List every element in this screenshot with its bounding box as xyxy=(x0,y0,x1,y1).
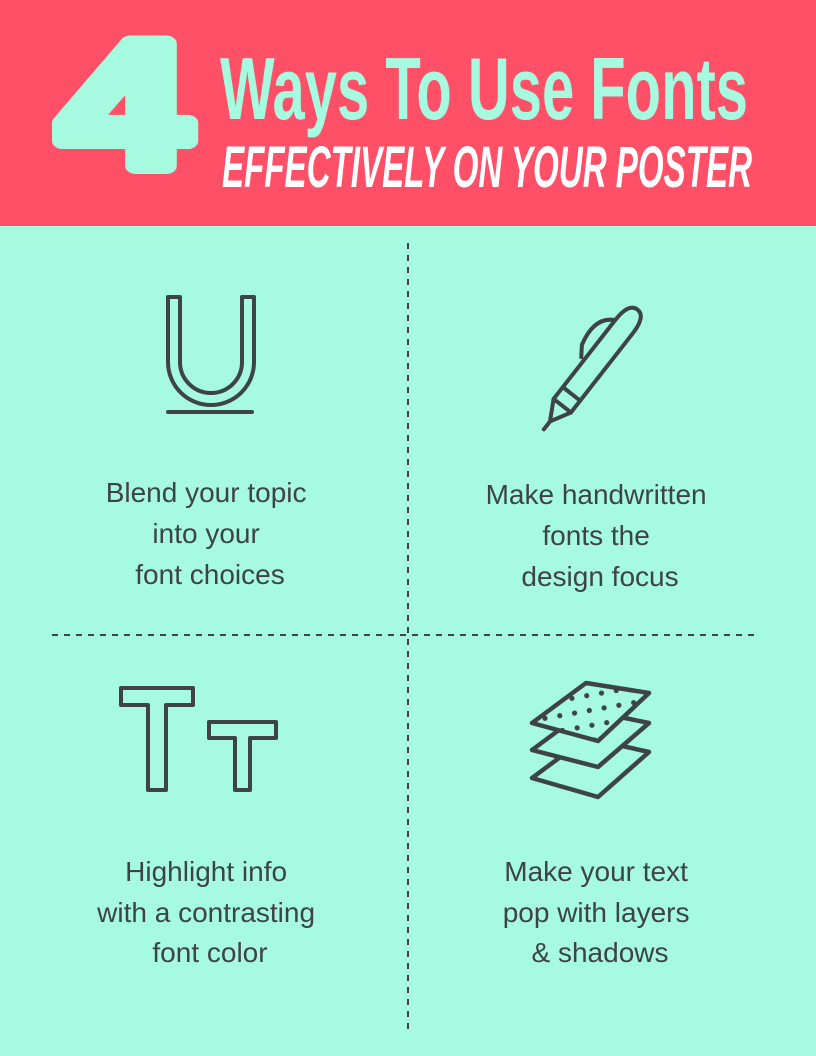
text: blend topic: into your xyxy=(152,518,260,549)
icon: layers xyxy=(532,683,649,797)
header banner xyxy=(0,0,816,226)
text: layers: pop with layers xyxy=(503,897,689,928)
text: blend topic: Blend your topic xyxy=(106,477,307,508)
text: layers: & shadows xyxy=(532,937,668,968)
text: layers: Make your text xyxy=(504,856,688,887)
text: highlight: Highlight info xyxy=(125,856,287,887)
text: handwritten: Make handwritten xyxy=(486,479,707,510)
text: highlight: font color xyxy=(152,937,268,968)
icon: pen xyxy=(525,295,646,436)
text: highlight: with a contrasting xyxy=(96,897,315,928)
text: blend topic: font choices xyxy=(135,559,285,590)
text: handwritten: design focus xyxy=(521,561,679,592)
icon: Tt xyxy=(121,688,276,790)
big number 4: 4 xyxy=(59,5,189,204)
icon: underline U xyxy=(168,297,254,412)
text: handwritten: fonts the xyxy=(542,520,650,551)
